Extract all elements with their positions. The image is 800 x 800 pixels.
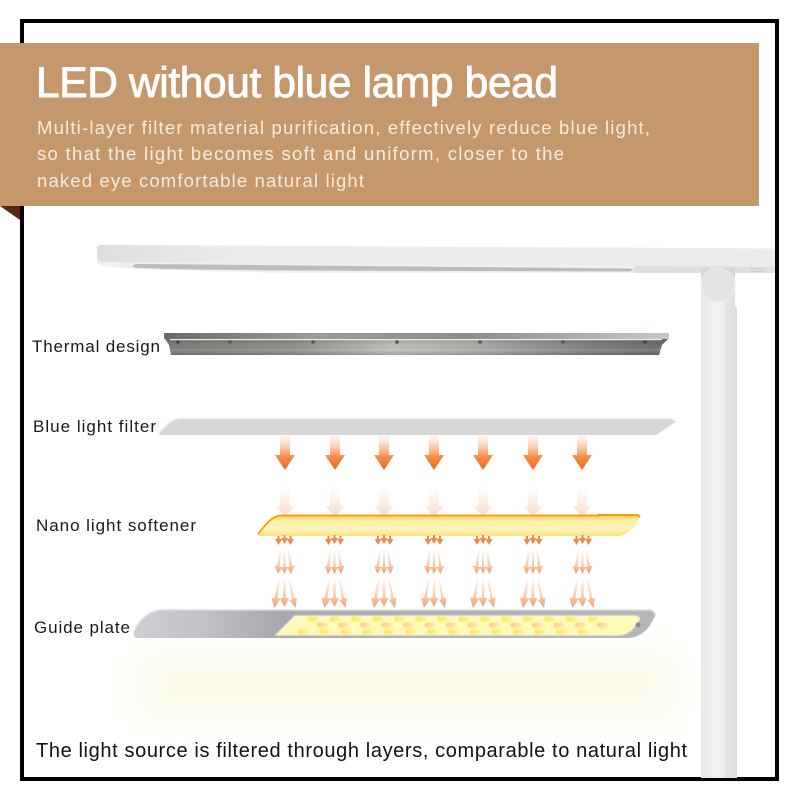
arrows: triple clusters between softener and guide plate bbox=[272, 535, 595, 608]
thermal plate front bbox=[165, 339, 668, 355]
lamp lip shade at the right end bbox=[634, 266, 775, 273]
guide plate body bbox=[134, 610, 655, 638]
lamp slot bbox=[133, 264, 634, 272]
description bbox=[37, 117, 650, 191]
label: nano light softener: Nano light softener bbox=[36, 516, 196, 535]
side vents bbox=[750, 268, 765, 272]
lamp pole bbox=[701, 276, 737, 778]
lamp head silhouette bbox=[97, 245, 775, 273]
joint housing bbox=[701, 268, 735, 292]
joint knob bbox=[701, 268, 735, 302]
layer: nano light softener bbox=[257, 515, 640, 536]
label: guide plate: Guide plate bbox=[34, 618, 130, 637]
bottom caption: The light source is filtered through layers, comparable to natural light bbox=[36, 740, 687, 762]
lit yellow panel bbox=[276, 616, 639, 635]
layer: thermal design bbox=[164, 333, 669, 355]
end screw bbox=[636, 622, 640, 628]
ribbon fold bbox=[0, 206, 20, 220]
desk lamp arm and joint bbox=[97, 245, 775, 778]
label: thermal design: Thermal design bbox=[32, 337, 160, 356]
thermal plate top edge bbox=[164, 333, 669, 339]
header banner bbox=[0, 43, 759, 206]
description: Multi-layer filter material purification, effectively reduce blue light, bbox=[37, 117, 650, 138]
description: so that the light becomes soft and uniform, closer to the bbox=[37, 143, 564, 164]
label: blue light filter: Blue light filter bbox=[33, 417, 156, 436]
arrows: solid orange row bbox=[275, 436, 592, 470]
layer: guide plate bbox=[134, 610, 655, 638]
layer: blue light filter bbox=[158, 418, 677, 435]
title: LED without blue lamp bead bbox=[36, 60, 558, 107]
lamp head front face bbox=[97, 245, 775, 266]
lamp beads bbox=[298, 616, 608, 634]
arrows: faded row bbox=[276, 487, 592, 516]
description: naked eye comfortable natural light bbox=[37, 170, 364, 191]
warm light glow under the lamp bbox=[135, 650, 680, 720]
